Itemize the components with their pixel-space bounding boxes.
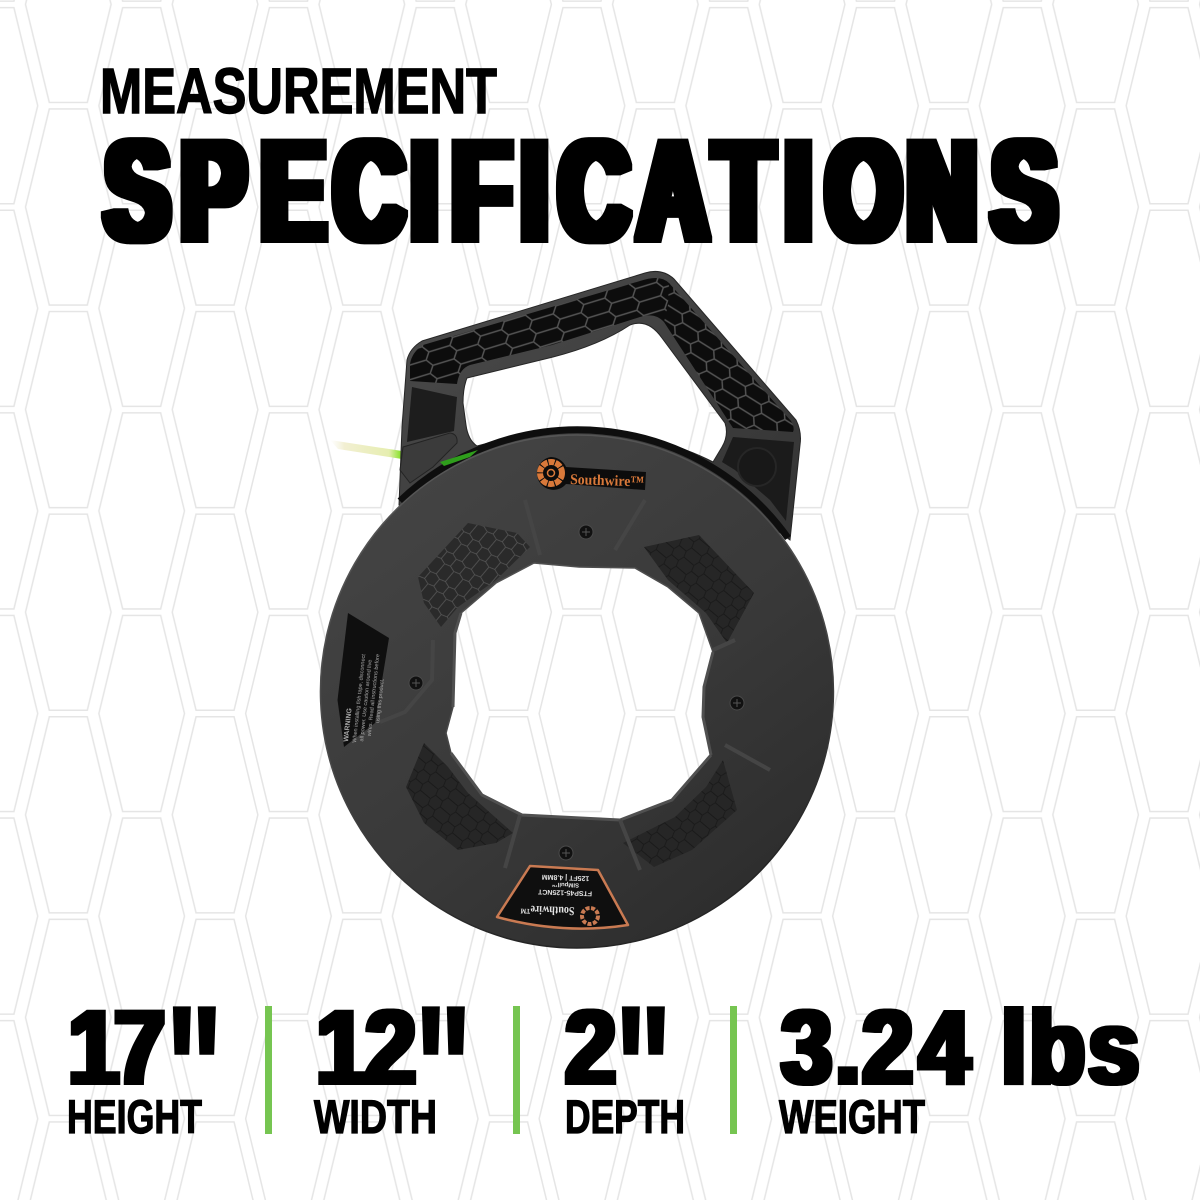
grip panel: top right [644,535,754,643]
handle [399,271,800,540]
stat: height [67,965,223,1178]
divider [265,1006,272,1134]
reel body [320,435,833,948]
value: 2 inches: 2 [565,988,616,1106]
value: 17 inches: 17 [68,988,165,1106]
handle pocket: right [722,437,794,521]
value: 2 inches [565,965,672,1178]
moulded ridges [380,500,770,870]
warning label: WARNING [343,707,354,742]
reel hole bevel [451,613,713,820]
divider [513,1006,520,1134]
value: 12 inches: 12 [316,988,416,1106]
top brand logo [537,457,646,491]
warning label: When installing fish tape, disconnect [352,653,367,743]
product: fish tape reel [320,271,833,948]
screws [409,525,744,860]
label: height: HEIGHT [67,1090,202,1143]
grip panel: top left [418,523,530,627]
green tape inside [440,450,478,466]
product label: FTSP45-125NCT [537,888,592,897]
product label [497,866,628,929]
label: weight: WEIGHT [779,1090,925,1143]
heading: measurement: MEASUREMENT [100,55,497,127]
grip panel: bottom left [406,743,513,850]
handle grip: top arm [410,278,680,384]
warning label: all power. Use caution around live [359,659,374,742]
value: 3.24 lbs: 3.24 lbs [781,988,1139,1106]
warning label: using this product. [375,678,386,723]
stat: weight [779,988,1139,1143]
handle pocket: left [407,387,457,442]
heading: specifications: SPECIFICATIONS [105,111,1056,270]
product label: Southwire™ [520,903,575,918]
title [100,55,1056,270]
value: 17 inches: " [166,965,223,1178]
stat: depth [565,965,685,1178]
warning label: wires. Read all instructions before [367,654,381,738]
handle clasp [400,433,457,483]
divider [730,1006,737,1134]
value: 12 inches [316,965,472,1178]
fish tape end [330,440,470,466]
label: width: WIDTH [314,1090,437,1143]
label: depth: DEPTH [565,1090,685,1143]
value: 17 inches [68,965,223,1178]
top brand logo: Southwire™ [570,472,644,491]
warning label [338,613,389,747]
value: 2 inches: " [615,965,672,1178]
product label: 125FT | 4.8MM [542,873,589,881]
grip panel: bottom right [623,760,737,867]
stat: width [314,965,472,1178]
product label: SIMpull™ [552,881,579,889]
handle grip: right arm [664,283,794,432]
value: 12 inches: " [415,965,472,1178]
rear rim of the reel [400,430,788,538]
